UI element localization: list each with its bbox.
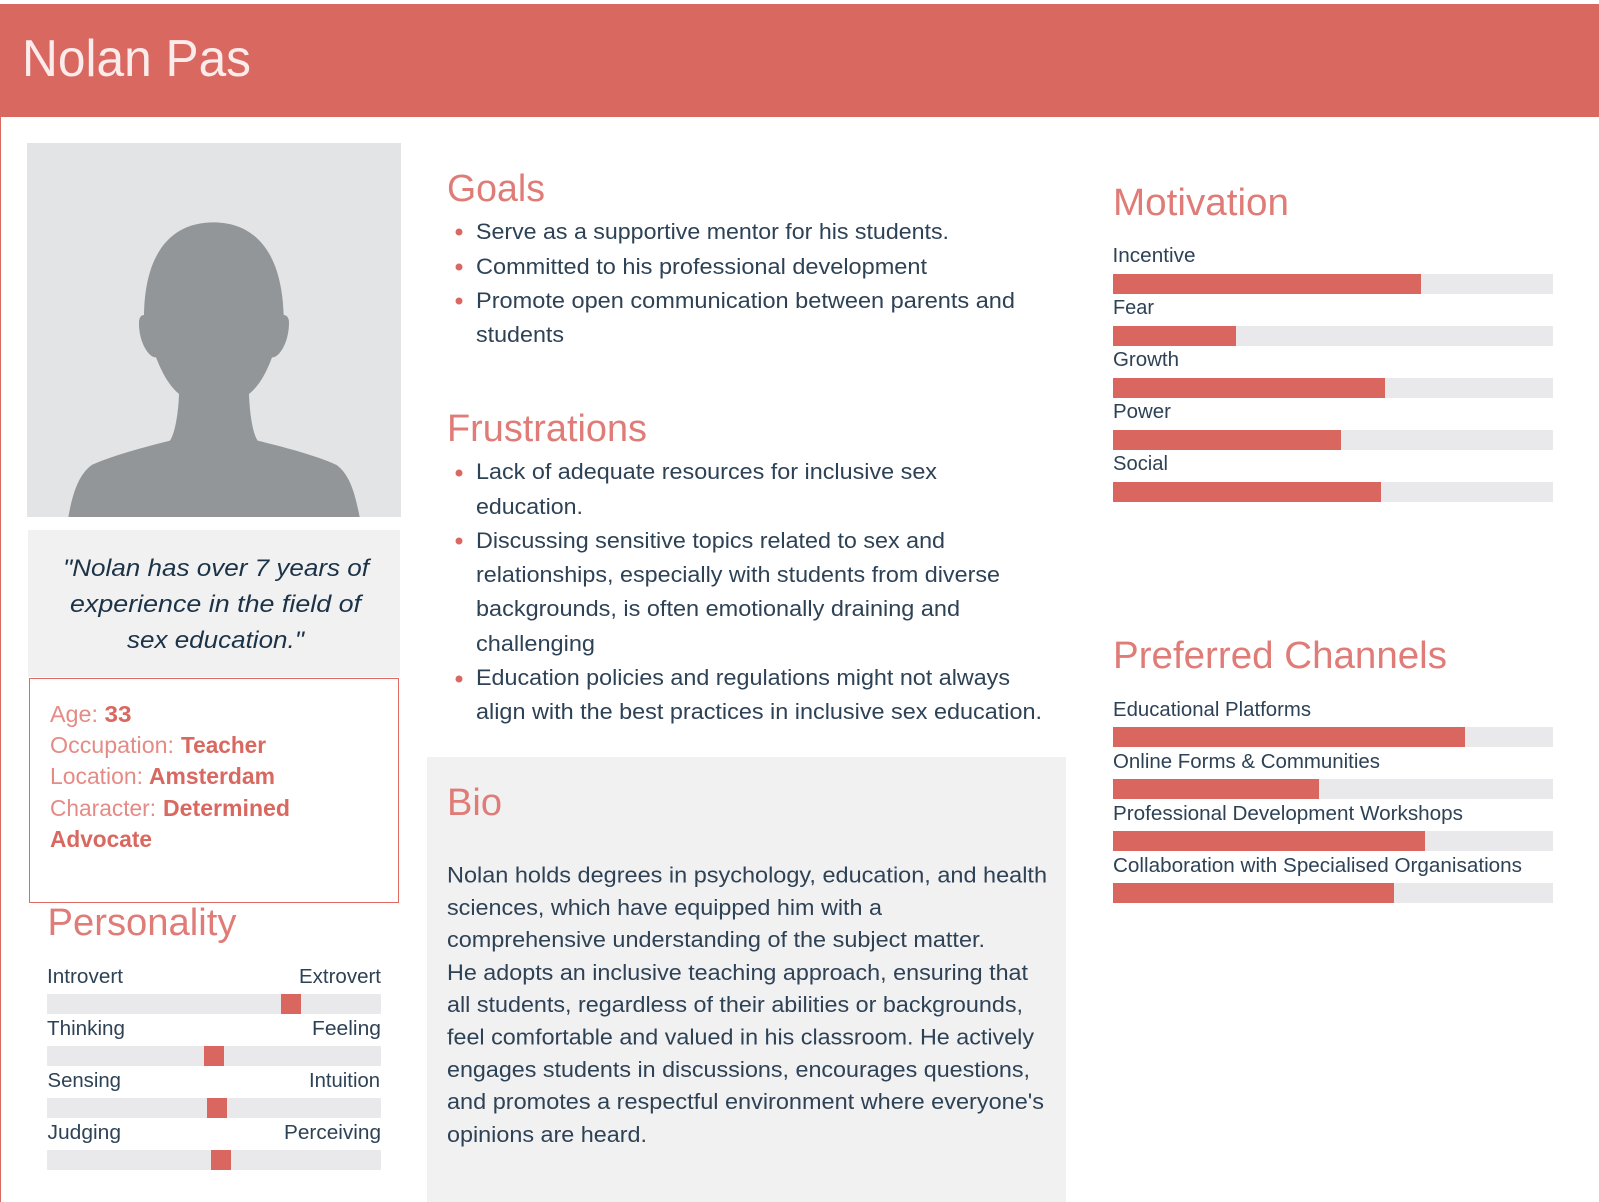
slider: Judging to Perceiving: Judging — [48, 1121, 121, 1144]
panel: demographic details: Teacher — [181, 732, 266, 758]
heading: Personality: Personality — [48, 902, 236, 944]
panel: demographic details: Occupation: — [50, 732, 174, 758]
frustrations list: backgrounds, is often emotionally draining and — [476, 596, 960, 621]
panel: quote: sex education." — [127, 627, 305, 654]
bar: Social — [1113, 452, 1553, 502]
bio text: sciences, which have equipped him with a — [447, 895, 882, 920]
bio text: Nolan holds degrees in psychology, education, and health — [447, 862, 1047, 888]
bar: Power: Power — [1113, 400, 1171, 423]
bar: Educational Platforms: Educational Platforms — [1113, 698, 1311, 721]
slider: Thinking to Feeling: Thinking — [47, 1017, 125, 1040]
slider: Thinking to Feeling — [47, 1017, 381, 1066]
bar: Fear: Fear — [1113, 296, 1154, 319]
photo placeholder with silhouette — [27, 143, 401, 517]
frustrations list — [456, 459, 1042, 724]
panel: goals — [447, 168, 1015, 347]
frustrations list: relationships, especially with students from diverse — [476, 562, 1000, 587]
panel: demographic details — [30, 678, 398, 902]
slider: Introvert to Extrovert: Introvert — [47, 965, 123, 988]
header banner with name — [0, 4, 1599, 117]
slider: Judging to Perceiving — [47, 1121, 381, 1170]
bar: Collaboration with Specialised Organisations: Collaboration with Specialised Organisations — [1113, 854, 1522, 877]
heading: Motivation: Motivation — [1113, 182, 1289, 224]
bar: Incentive: Incentive — [1112, 244, 1196, 267]
title: Nolan Pas: Nolan Pas — [22, 30, 251, 88]
slider: Introvert to Extrovert: Extrovert — [299, 965, 381, 988]
slider: Sensing to Intuition — [47, 1069, 381, 1118]
frustrations list: align with the best practices in inclusive sex education. — [476, 699, 1042, 724]
panel: demographic details: Determined — [163, 795, 290, 821]
slider: Sensing to Intuition: Sensing — [48, 1069, 121, 1092]
bar: Power — [1113, 400, 1553, 450]
bio text: He adopts an inclusive teaching approach, ensuring that — [447, 960, 1029, 985]
bio text — [447, 862, 1047, 1147]
heading: Frustrations: Frustrations — [447, 408, 647, 450]
panel: personality — [47, 902, 381, 1170]
frustrations list: Lack of adequate resources for inclusive sex — [476, 459, 938, 484]
bio text: all students, regardless of their abilities or backgrounds, — [447, 992, 1023, 1017]
panel: demographic details: Advocate — [50, 826, 152, 852]
bar: Growth — [1113, 348, 1553, 398]
panel: quote: experience in the field of — [70, 591, 363, 618]
panel: bio — [427, 757, 1066, 1202]
panel: demographic details: Character: — [50, 795, 156, 821]
bio text: comprehensive understanding of the subject matter. — [447, 927, 985, 952]
bar: Social: Social — [1113, 452, 1168, 475]
goals list: Committed to his professional development — [476, 254, 928, 279]
bar: Collaboration with Specialised Organisations — [1113, 854, 1553, 903]
bar: Incentive — [1112, 244, 1553, 294]
heading: Goals: Goals — [447, 168, 545, 210]
panel: motivation — [1112, 182, 1553, 502]
bio text: and promotes a respectful environment where everyone's — [447, 1089, 1044, 1114]
goals list — [456, 219, 1015, 347]
bar: Growth: Growth — [1113, 348, 1179, 371]
bio text: engages students in discussions, encourages questions, — [447, 1057, 1030, 1082]
frustrations list: education. — [476, 494, 583, 519]
bio text: opinions are heard. — [447, 1122, 647, 1147]
frustrations list: challenging — [476, 631, 595, 656]
panel: demographic details: Location: — [50, 763, 143, 789]
slider: Sensing to Intuition: Intuition — [309, 1069, 380, 1092]
panel: frustrations — [447, 408, 1042, 724]
panel: demographic details: Amsterdam — [149, 763, 275, 789]
heading: Bio: Bio — [447, 782, 502, 824]
goals list: Promote open communication between parents and — [476, 288, 1015, 313]
panel: quote: "Nolan has over 7 years of — [63, 555, 371, 582]
slider: Judging to Perceiving: Perceiving — [284, 1121, 381, 1144]
frustrations list: Education policies and regulations might not always — [476, 665, 1010, 690]
frustrations list: Discussing sensitive topics related to sex and — [476, 528, 945, 553]
slider: Introvert to Extrovert — [47, 965, 381, 1014]
goals list: students — [476, 322, 564, 347]
panel: demographic details: Age: — [50, 701, 98, 727]
bar: Professional Development Workshops: Professional Development Workshops — [1113, 802, 1463, 825]
bar: Online Forms & Communities — [1113, 750, 1553, 799]
heading: Preferred Channels: Preferred Channels — [1113, 635, 1447, 677]
panel: demographic details: 33 — [104, 701, 132, 727]
goals list: Serve as a supportive mentor for his students. — [476, 219, 949, 244]
panel: quote — [28, 530, 400, 677]
bar: Educational Platforms — [1113, 698, 1553, 747]
bar: Fear — [1113, 296, 1553, 346]
bar: Online Forms & Communities: Online Forms & Communities — [1113, 750, 1380, 773]
bar: Professional Development Workshops — [1113, 802, 1553, 851]
panel: preferred channels — [1113, 635, 1553, 903]
slider: Thinking to Feeling: Feeling — [312, 1017, 381, 1040]
bio text: feel comfortable and valued in his classroom. He actively — [447, 1024, 1035, 1050]
